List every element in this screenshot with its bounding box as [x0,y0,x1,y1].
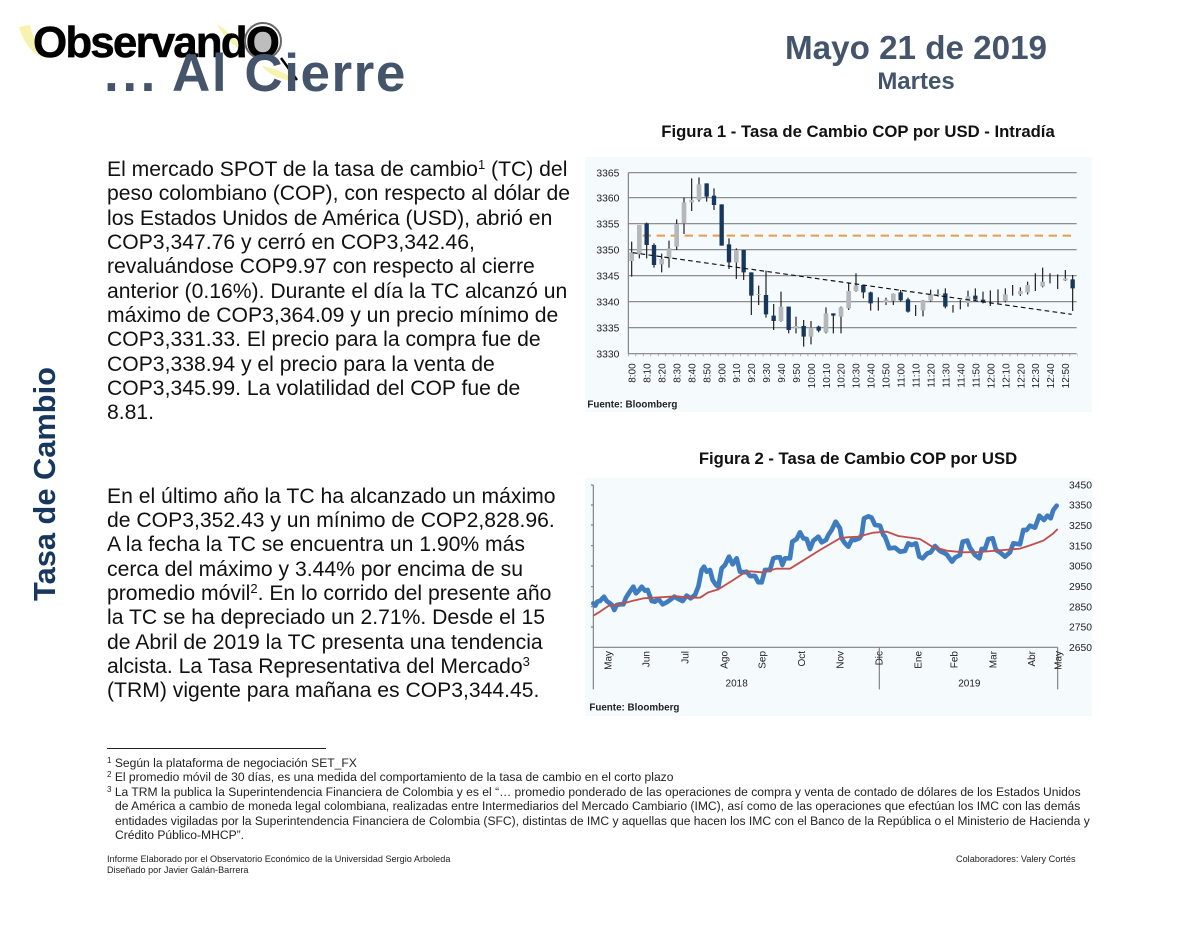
text block: mercado SPOT: anterior (0.16%). Durante el día la TC alcanzó un [107,280,567,303]
chart: exchange rate with moving average [585,478,1092,716]
y axis labels: 3360 [596,193,620,204]
month labels: May [604,651,615,670]
y axis labels [596,168,620,360]
month labels: Nov [835,651,846,669]
x axis time labels: 9:10 [732,363,743,383]
text block: mercado SPOT: COP3,331.33. El precio para la compra fue de [107,328,541,351]
text block: mercado SPOT: peso colombiano (COP), con respecto al dólar de [107,182,570,205]
month labels: Oct [797,651,808,667]
footnotes [107,756,1090,842]
right axis labels: 2750 [1069,623,1092,634]
footnotes: de América a cambio de moneda legal colombiana, realizadas entre Intermediarios del Mercado Cambiario (IMC), así como de las operaciones que efectúan los IMC con las demás [115,799,1080,813]
y axis labels: 3345 [596,271,620,282]
x axis time labels: 9:00 [717,363,728,383]
y axis labels: 3365 [596,168,620,179]
month labels: Dic [875,651,886,665]
text block: mercado SPOT: COP3,347.76 y cerró en COP3,342.46, [107,231,475,254]
right axis labels: 3050 [1069,562,1092,573]
text block: mercado SPOT: 8.81. [107,401,154,424]
x axis time labels: 11:20 [927,363,938,388]
footnote rule [107,748,326,749]
month labels: Feb [950,651,961,668]
x axis time labels: 12:30 [1031,363,1042,388]
title: Al Cierre [172,44,407,103]
month labels: Jun [641,651,652,667]
text block: mercado SPOT: máximo de COP3,364.09 y un precio mínimo de [107,304,558,327]
x axis time labels: 8:30 [672,363,683,383]
text block: último año [107,484,556,702]
text block: último año: de Abril de 2019 la TC presenta una tendencia [107,631,543,654]
section label: Tasa de Cambio: Tasa de Cambio [27,367,62,601]
month labels: Jul [681,651,692,664]
y axis labels: 3330 [596,349,620,360]
text block: último año: alcista. La Tasa Representativa del Mercado3 [107,654,530,678]
collaborators: Colaboradores: Valery Cortés [956,854,1076,864]
y axis labels: 3355 [596,219,620,230]
blue line: exchange rate [593,506,1057,610]
x axis time labels: 12:00 [986,363,997,388]
year labels: 2019 [958,679,981,690]
right axis labels: 3150 [1069,541,1092,552]
x axis time labels: 9:40 [777,363,788,383]
source note: Fuente: Bloomberg [589,702,679,713]
credits: Informe Elaborado por el Observatorio Económico de la Universidad Sergio Arboleda [107,854,450,864]
figure 1 title: Figura 1 - Tasa de Cambio COP por USD - Intradía [661,122,1055,141]
title: ... [104,44,159,103]
x axis time labels: 10:20 [837,363,848,388]
text block: último año: (TRM) vigente para mañana es COP3,344.45. [107,679,539,702]
right axis labels: 3450 [1069,480,1092,491]
x axis time labels: 12:40 [1046,363,1057,388]
text block: último año: cerca del máximo y 3.44% por encima de su [107,558,523,581]
x axis time labels: 8:10 [642,363,653,383]
text block: último año: promedio móvil2. En lo corrido del presente año [107,581,551,605]
x axis time labels: 10:00 [807,363,818,388]
candle bodies: navy [647,183,1073,337]
x axis time labels: 12:50 [1061,363,1072,388]
x axis time labels: 10:50 [882,363,893,388]
month labels [604,650,1065,670]
month labels: Ene [914,651,925,669]
right axis labels [1069,480,1092,654]
x axis time labels: 11:10 [912,363,923,388]
figure 2 title: Figura 2 - Tasa de Cambio COP por USD [699,449,1017,468]
date: Mayo 21 de 2019 [785,30,1047,67]
year labels: 2018 [726,679,748,690]
credits [107,854,450,875]
x axis time labels: 11:50 [971,363,982,388]
text block: último año: A la fecha la TC se encuentra un 1.90% más [107,533,525,556]
x axis time labels: 11:40 [956,363,967,388]
y axis labels: 3350 [596,245,620,256]
month labels: Abr [1027,650,1038,667]
text block: mercado SPOT: COP3,345.99. La volatilidad del COP fue de [107,377,520,400]
logo: Observando with magnifier [19,18,298,81]
month labels: Sep [758,651,769,669]
text block: mercado SPOT: los Estados Unidos de América (USD), abrió en [107,207,552,230]
text block: mercado SPOT [107,157,570,424]
month labels: Mar [989,650,1000,668]
right axis labels: 2950 [1069,582,1092,593]
text block: mercado SPOT: COP3,338.94 y el precio para la venta de [107,353,495,376]
y axis labels: 3335 [596,323,620,334]
credits: Diseñado por Javier Galán-Barrera [107,865,249,875]
text block: último año: de COP3,352.43 y un mínimo de COP2,828.96. [107,509,555,532]
text block: mercado SPOT: El mercado SPOT de la tasa de cambio1 (TC) del [107,157,567,181]
text block: último año: la TC se ha depreciado un 2.71%. Desde el 15 [107,606,545,629]
text block: último año: En el último año la TC ha alcanzado un máximo [107,484,556,508]
footnotes: entidades vigiladas por la Superintendencia Financiera de Colombia (SFC), distintas de IMC y aquellas que hacen los IMC con el Banco de la República o el Ministerio de Hacienda y [115,814,1090,828]
x axis time labels: 11:30 [941,363,952,388]
x axis time labels: 8:00 [627,363,638,383]
logo: Observando with magnifier: ObservandO [33,18,280,67]
footnotes: 3 La TRM la publica la Superintendencia Financiera de Colombia y es el “… promedio ponderado de las operaciones de compra y venta de contado de dólares de los Estados Unidos [107,785,1081,799]
x axis time labels: 12:20 [1016,363,1027,388]
x axis time labels: 10:40 [867,363,878,388]
candle wicks [632,177,1073,347]
year labels [726,679,981,690]
x axis time labels: 8:50 [702,363,713,383]
x axis time labels: 8:20 [657,363,668,383]
x axis time labels: 11:00 [897,363,908,388]
x axis time labels: 9:30 [762,363,773,383]
x axis time labels: 9:50 [792,363,803,383]
x axis time labels: 12:10 [1001,363,1012,388]
footnotes: Crédito Público-MHCP”. [115,828,244,842]
footnotes: 2 El promedio móvil de 30 días, es una medida del comportamiento de la tasa de cambio en el corto plazo [107,770,673,784]
x axis time labels: 10:30 [852,363,863,388]
month labels: May [1054,651,1065,670]
candle bodies: grey [632,184,1065,337]
right axis labels: 3250 [1069,521,1092,532]
right axis labels: 3350 [1069,501,1092,512]
weekday: Martes [877,68,955,95]
x axis time labels [627,363,1072,388]
x axis time labels: 8:40 [687,363,698,383]
y axis labels: 3340 [596,297,620,308]
footnotes: 1 Según la plataforma de negociación SET_FX [107,756,357,770]
text block: mercado SPOT: revaluándose COP9.97 con respecto al cierre [107,255,535,278]
right axis labels: 2650 [1069,643,1092,654]
x axis time labels: 10:10 [822,363,833,388]
x axis time labels: 9:20 [747,363,758,383]
month labels: Ago [720,651,731,669]
chart: intraday candlesticks [585,157,1092,412]
right axis labels: 2850 [1069,602,1092,613]
source note: Fuente: Bloomberg [587,399,677,410]
red line: moving average [593,529,1058,616]
